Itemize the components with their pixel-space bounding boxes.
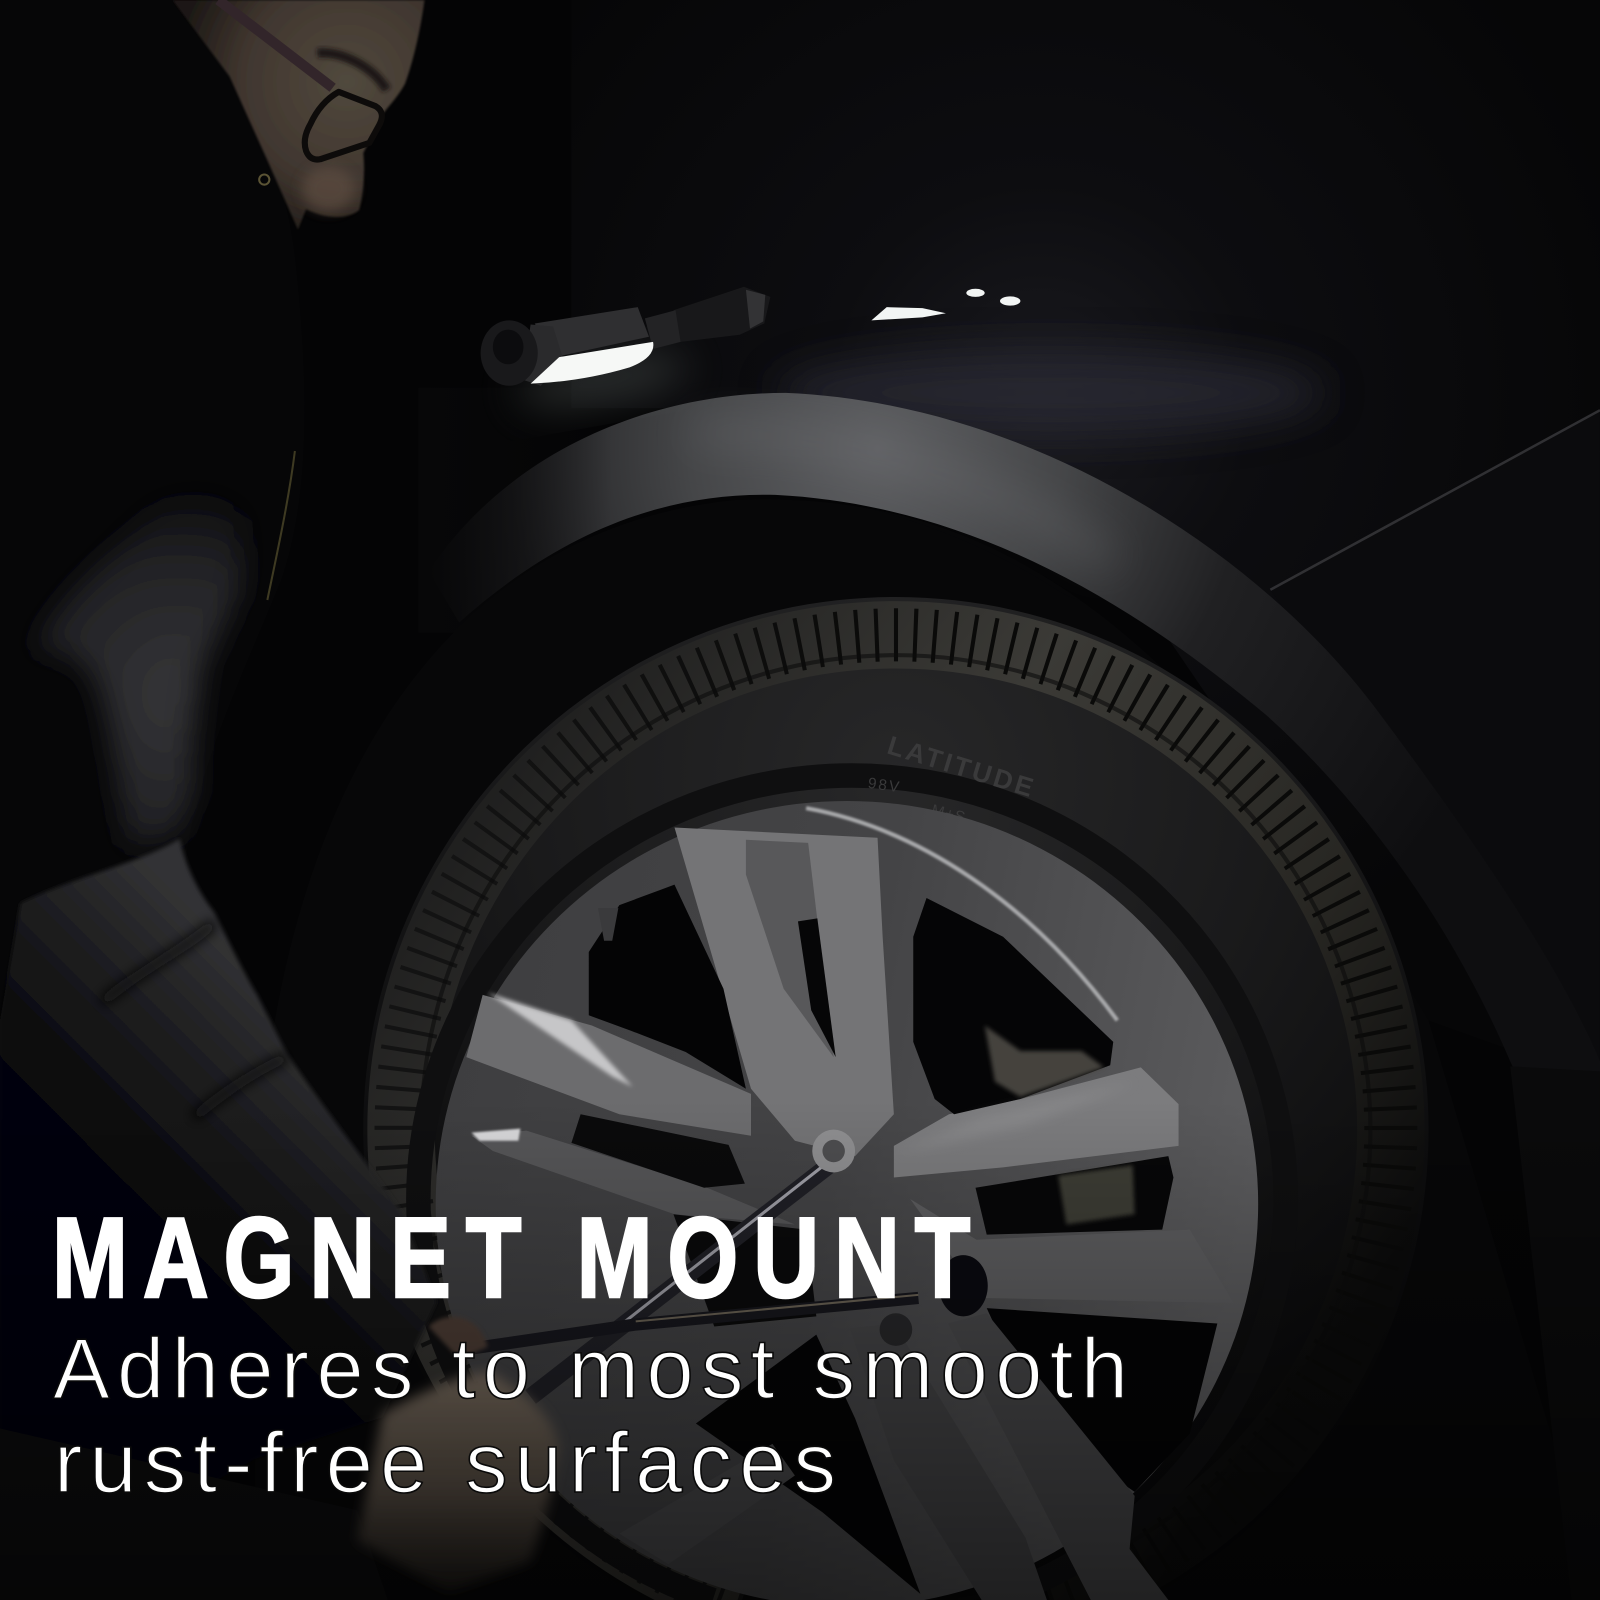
person glasses [218, 0, 382, 160]
lamp end collar [522, 324, 563, 386]
left spoke gap [571, 1114, 745, 1188]
description line two: rust-free surfaces [54, 1416, 836, 1511]
wrench bar highlight [612, 1163, 827, 1332]
upper left window [589, 885, 746, 1089]
tread band [401, 635, 1391, 1600]
vertical spoke [674, 828, 894, 1156]
wrench bar cross [461, 1298, 918, 1350]
valve stem [598, 908, 618, 941]
alloy rim [436, 801, 1258, 1600]
wrench knob [939, 1255, 988, 1316]
handle threads [746, 290, 765, 329]
bright spoke streak [488, 993, 633, 1087]
vertical spoke recess [746, 840, 834, 1057]
right spoke shine [898, 1082, 1138, 1153]
rim disc [436, 801, 1258, 1600]
bottom right spoke two [948, 1313, 1168, 1600]
floor texture [0, 1429, 388, 1600]
lamp glow [513, 342, 691, 417]
hub lower window [673, 1214, 816, 1327]
sleeve fold lower [194, 1057, 287, 1117]
tread blocks [401, 635, 1391, 1600]
lamp neck [645, 310, 681, 349]
work light [481, 287, 770, 417]
light handle [673, 287, 770, 342]
hoodie zipper [267, 451, 295, 600]
upper left spoke [466, 995, 751, 1136]
small reflection left [966, 289, 985, 297]
vertical spoke slot [798, 918, 836, 1057]
lug nut [880, 1313, 912, 1346]
main reflection [871, 307, 946, 320]
bottom window [696, 1335, 920, 1594]
description [53, 1322, 1128, 1511]
wrench socket [812, 1130, 855, 1172]
wrench bar long [531, 1163, 832, 1397]
lamp end cap [481, 320, 538, 386]
sparkle light pool on the door [776, 350, 1327, 436]
person eyebrow [317, 53, 387, 90]
fender left fade [418, 388, 612, 633]
light reflections [871, 289, 1020, 320]
wrench cross highlight [636, 1295, 918, 1321]
sleeve fold upper [102, 923, 214, 1002]
bottom right window [987, 1308, 1217, 1492]
description line one: Adheres to most smooth [53, 1322, 1128, 1417]
tread groove [421, 655, 1370, 1600]
person arm [0, 839, 437, 1600]
fender flare [429, 393, 1600, 1255]
person hoodie shadow [0, 0, 305, 1122]
lamp LED panel [531, 342, 653, 384]
bottom darkening [0, 1100, 1600, 1600]
person finger [429, 1317, 488, 1359]
glasses lens [305, 92, 382, 160]
sidewall size mark: 98V [867, 775, 902, 796]
drawstring clasp [259, 174, 269, 185]
bottom left panel [619, 1444, 795, 1564]
right lower spoke [910, 1199, 1234, 1303]
lower left spoke [471, 1131, 795, 1224]
right upper spoke [894, 1067, 1179, 1178]
small reflection right [1000, 296, 1020, 306]
right lower window [976, 1156, 1173, 1235]
sidewall rim shoulder [418, 775, 1286, 1600]
rim top edge highlight [806, 808, 1117, 1020]
hoodie lit shoulder [31, 499, 245, 849]
tire [363, 597, 1429, 1600]
fender highlight [694, 433, 1112, 561]
spoke highlight [471, 1129, 520, 1141]
brake caliper [985, 1026, 1104, 1097]
wrench socket ring [822, 1140, 845, 1162]
wheel arch interior [255, 499, 1600, 1600]
sidewall season mark: M+S [930, 802, 968, 827]
rear quarter panel [1510, 1066, 1600, 1600]
upper right window [913, 898, 1113, 1114]
person nose [302, 166, 355, 211]
bottom right spoke one [850, 1323, 1047, 1600]
car body panel [571, 0, 1600, 1082]
door gap line [1270, 410, 1600, 590]
person hand [357, 1372, 559, 1592]
lug wrench [461, 1130, 988, 1397]
brake disc detail [1058, 1165, 1135, 1224]
lower door panel [1270, 410, 1600, 1061]
title: MAGNET MOUNT [52, 1194, 970, 1321]
tire body [363, 597, 1429, 1600]
lamp ribbed body [535, 307, 649, 357]
glasses temple [218, 0, 333, 88]
person face [172, 0, 424, 230]
sidewall lettering: LATITUDE [884, 730, 1040, 804]
lamp end lens [493, 330, 523, 364]
